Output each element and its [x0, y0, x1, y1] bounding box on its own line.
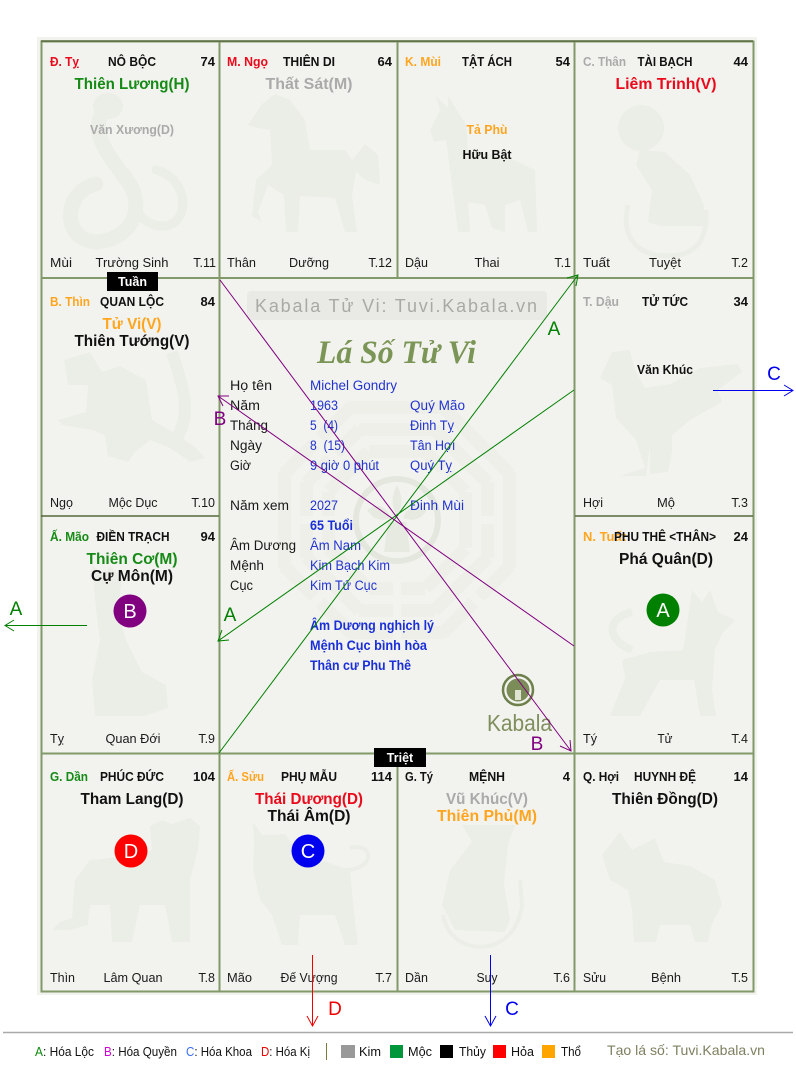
palace: Nô Bộc: Trường Sinh [96, 255, 168, 270]
palace: Mệnh: 4 [563, 769, 571, 784]
palace: Tử Tức: Mộ [657, 495, 675, 510]
palace: Mệnh: MỆNH [469, 769, 505, 784]
arrow labels: C [505, 999, 519, 1020]
palace: Nô Bộc: Đ. Tỵ [50, 54, 80, 69]
badge: C [292, 834, 324, 868]
palace: Thiên Di: Dưỡng [289, 255, 329, 270]
palace: Tử Tức: Hợi [583, 495, 603, 510]
palace: Điền Trạch [50, 529, 216, 746]
birth details: 2027 [310, 498, 338, 513]
palace: Phúc Đức: Lâm Quan [104, 970, 162, 985]
arrow labels: C [767, 364, 781, 385]
legend: elements: Kim [359, 1044, 381, 1059]
arrow: D down [307, 955, 318, 1026]
palace: Thiên Di: THIÊN DI [283, 54, 335, 69]
zodiac animal: dragon [58, 352, 205, 462]
palace: Quan Lộc: Ngọ [50, 495, 73, 510]
palace: Điền Trạch: ĐIỀN TRẠCH [96, 529, 170, 544]
palace: Tài Bạch: Tuyệt [649, 255, 681, 270]
palace: Huynh Đệ: Q. Hợi [583, 769, 619, 784]
palace: Phúc Đức: Thìn [50, 970, 75, 985]
palace: Tử Tức: Văn Khúc [637, 362, 693, 377]
palace: Thiên Di [227, 54, 393, 270]
legend: transformations: D: Hóa Kị [261, 1044, 310, 1059]
Kabala logo [487, 675, 552, 736]
birth details: Mệnh [230, 558, 264, 573]
birth details: Âm Dương [230, 538, 296, 553]
palace: Tật Ách: T.1 [554, 256, 571, 270]
palace: Điền Trạch: Tỵ [50, 731, 64, 746]
palace: Phúc Đức: 104 [193, 769, 216, 784]
palace: Phu Thê: 24 [734, 529, 749, 544]
palace: Quan Lộc: 84 [201, 294, 216, 309]
birth details: 65 Tuổi [310, 518, 353, 533]
birth details: Họ tên [230, 378, 272, 393]
palace: Nô Bộc: Văn Xương(D) [90, 122, 174, 137]
palace: Phụ Mẫu: Thái Dương(D) [255, 791, 363, 808]
palace: Tài Bạch: Liêm Trinh(V) [616, 76, 716, 93]
palace: Nô Bộc: Mùi [50, 255, 72, 270]
arrow: A green diagonal [219, 275, 578, 753]
palace: Quan Lộc: B. Thìn [50, 294, 90, 309]
tag: Triệt [374, 748, 426, 767]
palace: Mệnh: T.6 [553, 971, 570, 985]
birth details: Thân cư Phu Thê [310, 658, 411, 673]
legend: transformations [35, 1044, 310, 1059]
palace: Mệnh: Dần [405, 970, 428, 985]
tag: Tuần [107, 272, 158, 291]
palace: Điền Trạch: T.9 [198, 732, 215, 746]
palace: Điền Trạch: Thiên Cơ(M) [86, 551, 178, 568]
zodiac animal: goat [430, 96, 537, 232]
birth details: 9 giờ 0 phút [310, 458, 379, 473]
palace: Phụ Mẫu: T.7 [375, 971, 392, 985]
zodiac animal: pig [602, 832, 722, 942]
badge: B [114, 594, 146, 628]
palace: Thiên Di: M. Ngọ [227, 54, 268, 69]
birth details: Cục [230, 578, 253, 593]
palace: Huynh Đệ: HUYNH ĐỆ [634, 769, 696, 784]
palace: Nô Bộc: NÔ BỘC [108, 54, 157, 69]
palace: Tử Tức: 34 [734, 294, 749, 309]
palace: Quan Lộc: QUAN LỘC [100, 294, 165, 309]
palace: Huynh Đệ: Bệnh [651, 970, 681, 985]
palace: Phu Thê: Tử [658, 731, 673, 746]
palace: Quan Lộc [50, 294, 216, 510]
palace: Quan Lộc: Mộc Dục [108, 495, 158, 510]
palace: Tật Ách: Thai [474, 255, 500, 270]
tag: Triệt: Triệt [387, 751, 414, 765]
birth details: Quý Tỵ [410, 458, 452, 473]
palace: Tử Tức [583, 294, 749, 510]
zodiac animal: monkey [618, 105, 706, 256]
legend: transformations: A: Hóa Lộc [35, 1044, 94, 1059]
palace: Phu Thê [583, 529, 749, 746]
palace: Phụ Mẫu: PHỤ MẪU [281, 769, 337, 784]
birth details: Mệnh Cục bình hòa [310, 638, 427, 653]
badge: D: D [124, 841, 138, 863]
Kabala logo: Kabala [487, 710, 552, 736]
palace: Điền Trạch: Ấ. Mão [50, 529, 89, 544]
palace: Phụ Mẫu: 114 [371, 769, 393, 784]
arrow labels: A [224, 605, 237, 626]
palace: Tật Ách [405, 54, 571, 270]
arrow labels: A [10, 599, 23, 620]
badge: D [114, 834, 148, 868]
zodiac animal: rabbit [92, 565, 168, 716]
palace: Mệnh: Suy [476, 970, 498, 985]
legend: elements: Thủy [459, 1044, 486, 1059]
birth details: Giờ [230, 458, 251, 473]
palace: Quan Lộc: Thiên Tướng(V) [74, 333, 190, 350]
legend: elements [341, 1044, 581, 1059]
birth details: Ngày [230, 438, 262, 453]
centre bagua watermark [278, 401, 516, 639]
palace: Tật Ách: Dậu [405, 255, 428, 270]
palace: Tật Ách: Hữu Bật [462, 147, 512, 162]
legend: elements: Thổ [561, 1044, 581, 1059]
palace: Thiên Di: T.12 [368, 256, 392, 270]
legend: elements: Mộc [408, 1044, 432, 1059]
palace: Tài Bạch: 44 [734, 54, 749, 69]
arrow labels: B [531, 734, 543, 755]
palace: Tật Ách: 54 [556, 54, 571, 69]
zodiac animal: ox [253, 822, 368, 945]
palace: Quan Lộc: T.10 [191, 496, 215, 510]
palace: Phúc Đức: PHÚC ĐỨC [100, 769, 165, 784]
birth details: Tháng [230, 418, 268, 433]
birth details: 5 (4) [310, 418, 338, 433]
badge: B: B [123, 601, 137, 623]
palace: Tài Bạch: Tuất [583, 255, 610, 270]
palace: Thiên Di: 64 [378, 54, 393, 69]
palace: Mệnh: Thiên Phủ(M) [437, 808, 537, 825]
badge: A [646, 594, 680, 626]
palace: Tài Bạch [583, 54, 749, 270]
chart grid [41, 41, 754, 992]
palace: Phụ Mẫu: Thái Âm(D) [268, 807, 350, 825]
birth details: Âm Dương nghịch lý [310, 618, 434, 633]
palace: Huynh Đệ: Thiên Đồng(D) [612, 791, 718, 808]
palace: Phu Thê: Phá Quân(D) [619, 551, 713, 568]
zodiac animal: rat [442, 825, 522, 947]
birth details: Tân Hợi [410, 438, 455, 453]
birth details: Kim Bạch Kim [310, 558, 390, 573]
birth details: Kim Tứ Cục [310, 578, 377, 593]
palace: Nô Bộc [50, 54, 216, 270]
palace: Mệnh: Vũ Khúc(V) [446, 791, 528, 808]
zodiac animal: horse [248, 94, 380, 232]
palace: Mệnh: G. Tý [405, 769, 434, 784]
palace: Huynh Đệ: Sửu [583, 970, 606, 985]
birth details: 1963 [310, 398, 338, 413]
birth details: Năm xem [230, 498, 289, 513]
legend: elements: Hỏa [511, 1044, 535, 1059]
zodiac animal: snake [70, 93, 183, 242]
palace: Quan Lộc: Tử Vi(V) [102, 316, 162, 333]
birth details: Quý Mão [410, 398, 465, 413]
arrow: B purple second [218, 396, 574, 646]
palace: Thiên Di: Thất Sát(M) [266, 76, 352, 93]
zodiac animal: rooster [600, 350, 742, 476]
palace: Tật Ách: K. Mùi [405, 54, 441, 69]
palace: Nô Bộc: T.11 [193, 256, 216, 270]
birth details: Đinh Tỵ [410, 418, 454, 433]
palace: Huynh Đệ: 14 [734, 769, 749, 784]
title: Lá Số Tử Vi [316, 335, 477, 371]
birth details: Michel Gondry [310, 378, 397, 393]
palace: Nô Bộc: Thiên Lương(H) [74, 76, 190, 93]
palace: Tử Tức: T. Dậu [583, 294, 619, 309]
palace: Phụ Mẫu: Mão [227, 970, 252, 985]
arrow labels: A [548, 319, 561, 340]
palace: Tài Bạch: T.2 [731, 256, 748, 270]
birth details: Âm Nam [310, 538, 361, 553]
birth details [230, 378, 465, 673]
zodiac animal: dog [610, 590, 735, 716]
arrow: C down [485, 955, 496, 1026]
palace: Tử Tức: T.3 [731, 496, 748, 510]
palace: Huynh Đệ [583, 769, 749, 985]
birth details: Năm [230, 398, 260, 413]
palace: Nô Bộc: 74 [201, 54, 216, 69]
badge: C: C [301, 841, 315, 863]
palace: Phụ Mẫu: Ấ. Sửu [227, 769, 264, 784]
palace: Phu Thê: PHU THÊ <THÂN> [614, 529, 716, 544]
palace: Phụ Mẫu: Đế Vượng [280, 970, 338, 985]
arrow: B purple diagonal [220, 280, 571, 751]
palace: Phúc Đức [50, 769, 216, 985]
birth details: Đinh Mùi [410, 498, 464, 513]
palace: Tật Ách: TẬT ÁCH [462, 54, 512, 69]
arrow: A left [5, 620, 87, 631]
palace: Điền Trạch: 94 [201, 529, 216, 544]
arrow labels: D [328, 999, 342, 1020]
palace: Tài Bạch: C. Thân [583, 54, 626, 69]
palace: Phu Thê: Tý [583, 731, 597, 746]
palace: Phúc Đức: G. Dần [50, 769, 88, 784]
palace: Điền Trạch: Quan Đới [106, 731, 161, 746]
palace: Mệnh [405, 769, 571, 985]
arrow labels [10, 319, 781, 1020]
site banner: Kabala Tử Vi: Tuvi.Kabala.vn [255, 296, 537, 316]
arrow: C right [713, 385, 793, 396]
palace: Phúc Đức: Tham Lang(D) [80, 791, 184, 808]
footer rule [3, 1032, 793, 1034]
tag: Tuần: Tuần [118, 275, 147, 289]
badge: A: A [656, 600, 670, 622]
legend: transformations: C: Hóa Khoa [186, 1044, 253, 1059]
legend: transformations: B: Hóa Quyền [104, 1044, 177, 1059]
birth details: 8 (15) [310, 438, 345, 453]
zodiac animal: tiger [52, 818, 200, 942]
palace: Tài Bạch: TÀI BẠCH [638, 54, 692, 69]
palace: Phu Thê: N. Tuất [583, 529, 627, 544]
palace: Điền Trạch: Cự Môn(M) [91, 568, 173, 585]
site banner [247, 291, 547, 320]
palace: Thiên Di: Thân [227, 255, 256, 270]
arrow: A green second [218, 390, 574, 641]
palace: Tật Ách: Tả Phù [466, 122, 508, 137]
palace: Phụ Mẫu [227, 769, 393, 985]
palace: Phu Thê: T.4 [731, 732, 748, 746]
palace: Phúc Đức: T.8 [198, 971, 215, 985]
arrow labels: B [214, 409, 226, 430]
palace: Tử Tức: TỬ TỨC [642, 294, 689, 309]
palace: Huynh Đệ: T.5 [731, 971, 748, 985]
footer site link: Tạo lá số: Tuvi.Kabala.vn [607, 1042, 765, 1058]
